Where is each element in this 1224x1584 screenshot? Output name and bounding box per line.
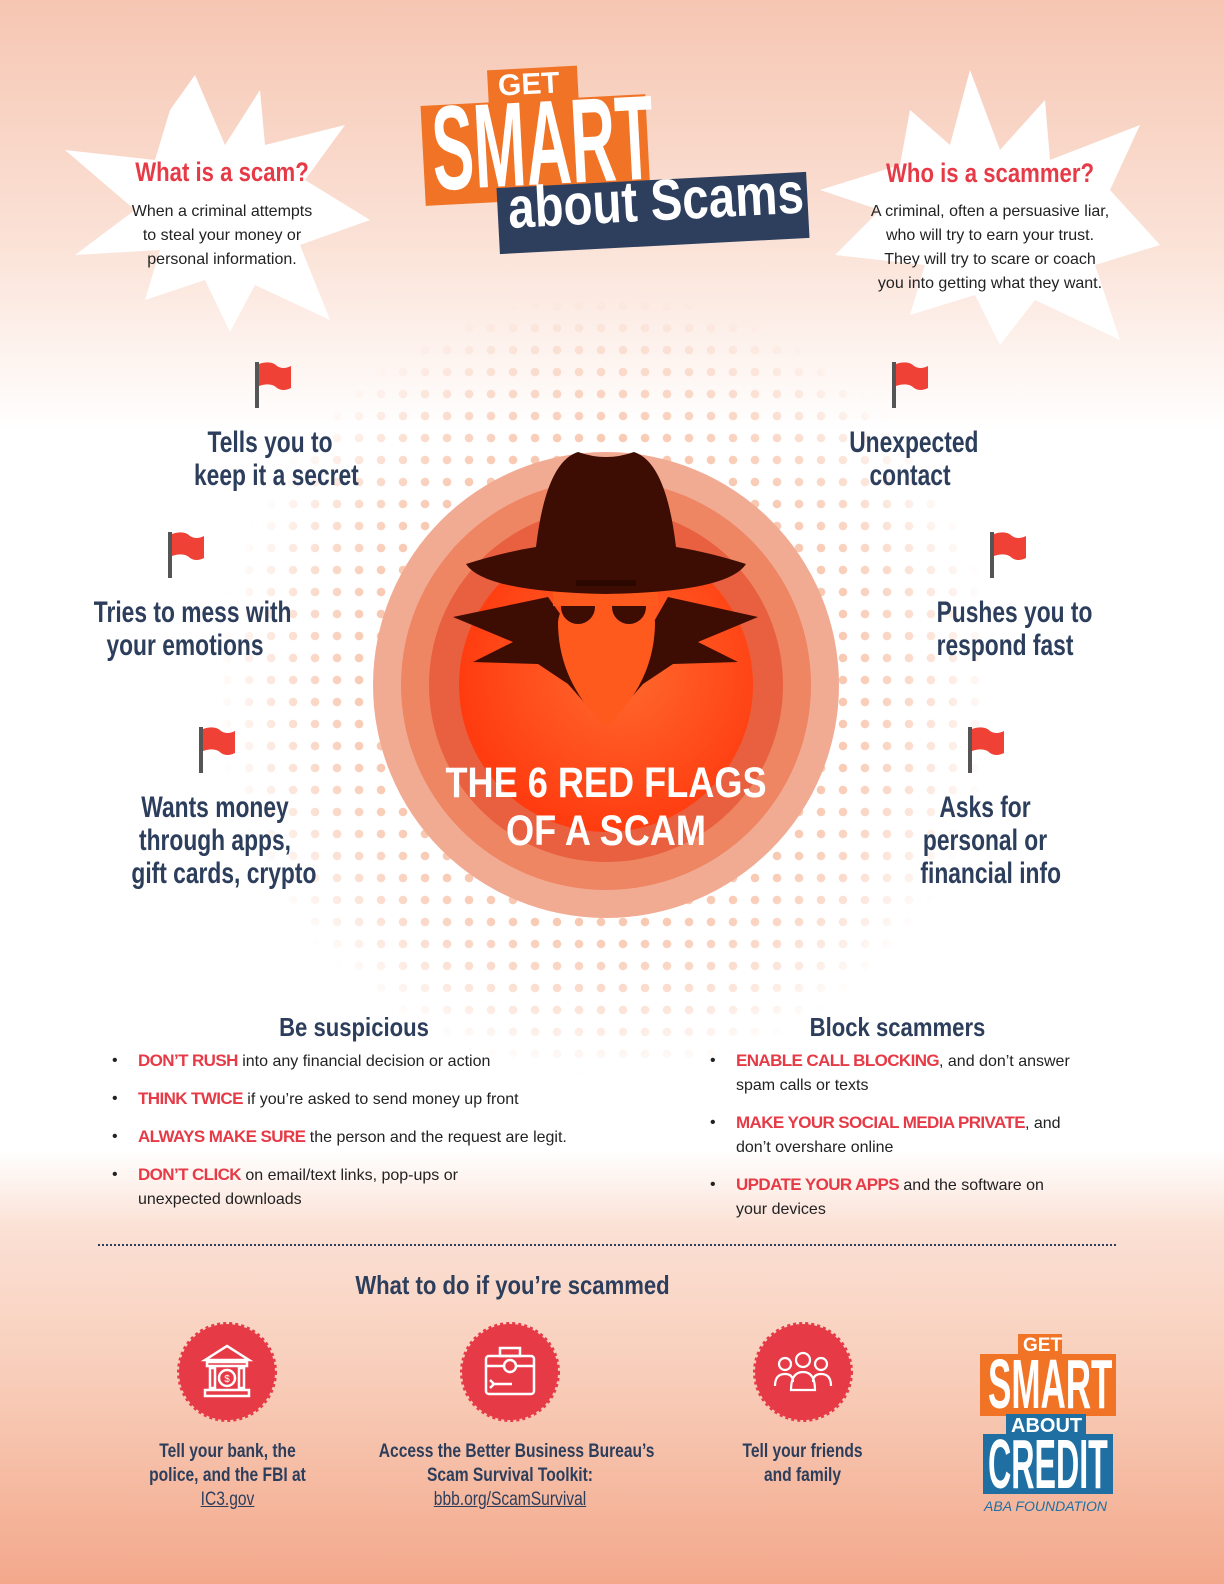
text: personal info: personal or (923, 824, 1047, 857)
action 2: BBB toolkit (379, 1322, 654, 1510)
list: block tips: UPDATE YOUR APPS and the software on (736, 1175, 1044, 1194)
text: keep it a secret: keep it a secret (194, 459, 359, 492)
panel: block scammers (710, 1012, 1070, 1218)
heading: block scammers: Block scammers (810, 1012, 985, 1042)
text: tell your bank (149, 1441, 306, 1510)
title logo: GET (497, 66, 560, 103)
heading: the 6 red flags of a scam (445, 759, 767, 855)
text: wants money (131, 791, 316, 890)
flag 4: unexpected contact (849, 362, 978, 492)
text: scam definition (132, 203, 312, 268)
center circle with spy (373, 452, 839, 918)
icon: toolkit (460, 1322, 560, 1422)
text: keep it a secret: Tells you to (208, 426, 332, 459)
text: BBB (379, 1441, 654, 1510)
halftone dots background (216, 295, 996, 1075)
text: personal info (920, 791, 1061, 890)
text: wants money: gift cards, crypto (131, 857, 316, 890)
logo: get smart about credit: SMART (988, 1345, 1112, 1423)
text: scammer definition: who will try to earn your trust. (886, 227, 1094, 244)
text: respond fast: Pushes you to (937, 596, 1092, 629)
text: wants money: through apps, (139, 824, 291, 857)
text: unexpected contact (849, 426, 978, 492)
text: tell friends: Tell your friends (742, 1441, 863, 1462)
action 3: friends and family (742, 1322, 863, 1486)
list: suspicious tips: THINK TWICE if you’re asked to send money up front (138, 1089, 519, 1108)
text: mess with emotions: Tries to mess with (94, 596, 291, 629)
text: wants money: Wants money (141, 791, 289, 824)
text: scam definition: personal information. (147, 251, 297, 268)
icon: bank: $ (224, 1374, 230, 1385)
text: respond fast (937, 596, 1092, 662)
list: block tips (710, 1051, 1070, 1218)
panel: be suspicious (112, 1012, 567, 1208)
list: block tips: your devices (736, 1201, 826, 1218)
text: personal info: Asks for (939, 791, 1031, 824)
text: tell your bank: IC3.gov (201, 1489, 254, 1510)
text: scammer definition (871, 203, 1109, 292)
heading: what to do if scammed: What to do if you’re scammed (355, 1270, 670, 1300)
flag 3: money (131, 727, 316, 890)
logo: get smart about credit (980, 1334, 1116, 1514)
text: unexpected contact: Unexpected (849, 426, 978, 459)
logo: get smart about credit: GET (1023, 1335, 1062, 1356)
logo: get smart about credit: ABA FOUNDATION (984, 1498, 1107, 1514)
title logo (420, 66, 810, 254)
list: suspicious tips: unexpected downloads (138, 1191, 302, 1208)
text: BBB: bbb.org/ScamSurvival (434, 1489, 586, 1510)
list: suspicious tips: ALWAYS MAKE SURE the person and the request are legit. (138, 1127, 567, 1146)
text: tell friends: and family (764, 1465, 841, 1486)
text: tell friends (742, 1441, 863, 1486)
heading: what is a scam: What is a scam? (135, 157, 309, 187)
flag 6: personal info (920, 727, 1061, 890)
flag 1: secret (194, 362, 359, 492)
text: personal info: financial info (920, 857, 1061, 890)
heading: the 6 red flags of a scam: OF A SCAM (506, 807, 706, 855)
text: scam definition: to steal your money or (143, 227, 301, 244)
list: block tips: MAKE YOUR SOCIAL MEDIA PRIVATE, and (736, 1113, 1061, 1132)
list: suspicious tips: DON’T CLICK on email/text links, pop-ups or (138, 1165, 458, 1184)
list: suspicious tips: DON’T RUSH into any financial decision or action (138, 1051, 490, 1070)
starburst: who is a scammer (820, 70, 1160, 344)
text: mess with emotions (94, 596, 291, 662)
icon: spy (453, 452, 758, 726)
list: suspicious tips (112, 1051, 567, 1208)
text: mess with emotions: your emotions (106, 629, 264, 662)
flag 5: respond fast (937, 532, 1092, 662)
text: BBB: Scam Survival Toolkit: (427, 1465, 593, 1486)
list: block tips: don’t overshare online (736, 1139, 893, 1156)
list: block tips: spam calls or texts (736, 1077, 868, 1094)
title logo: about Scams (506, 161, 805, 241)
list: block tips: ENABLE CALL BLOCKING, and don’t answer (736, 1051, 1070, 1070)
text: scam definition: When a criminal attempts (132, 203, 312, 220)
text: tell your bank: police, and the FBI at (149, 1465, 306, 1486)
action 1: tell bank (149, 1322, 306, 1510)
text: scammer definition: A criminal, often a persuasive liar, (871, 203, 1109, 220)
text: keep it a secret (194, 426, 359, 492)
flag 2: emotions (94, 532, 291, 662)
heading: who is a scammer: Who is a scammer? (886, 158, 1094, 188)
title logo: SMART (428, 70, 657, 216)
text: scammer definition: you into getting what they want. (878, 275, 1102, 292)
text: scammer definition: They will try to scare or coach (884, 251, 1096, 268)
heading: be suspicious: Be suspicious (279, 1012, 429, 1042)
text: BBB: Access the Better Business Bureau’s (379, 1441, 654, 1462)
text: unexpected contact: contact (869, 459, 951, 492)
heading: the 6 red flags of a scam: THE 6 RED FLAGS (445, 759, 767, 807)
text: respond fast: respond fast (937, 629, 1073, 662)
starburst: what is a scam (65, 75, 370, 332)
icon: bank (177, 1322, 277, 1422)
logo: get smart about credit: ABOUT (1011, 1415, 1082, 1437)
text: tell your bank: Tell your bank, the (159, 1441, 296, 1462)
icon: people (753, 1322, 853, 1422)
logo: get smart about credit: CREDIT (988, 1425, 1108, 1503)
